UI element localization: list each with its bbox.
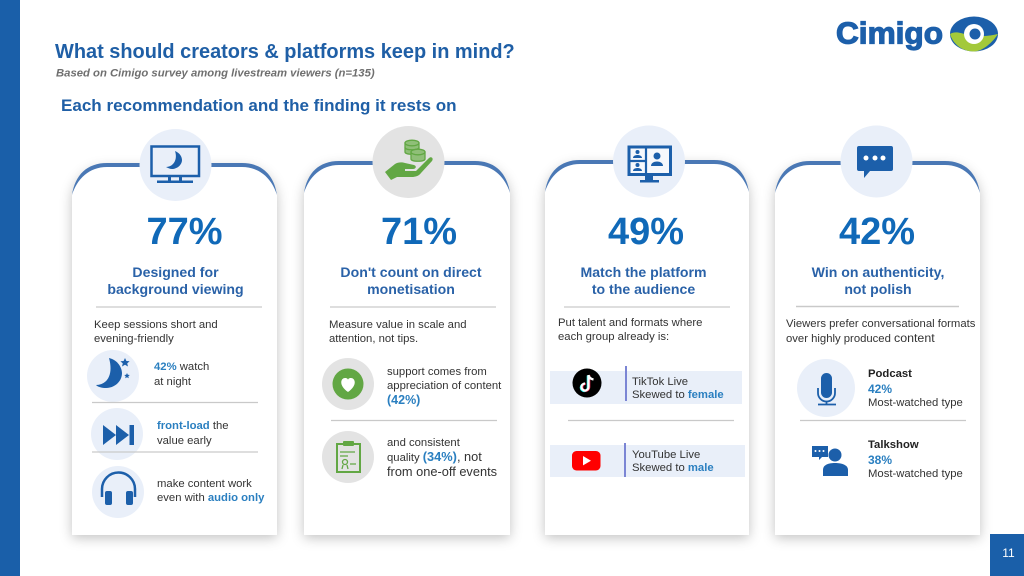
icon: heart	[322, 358, 374, 410]
intro text: evening-friendly	[94, 333, 174, 345]
panel: authenticity	[775, 126, 980, 535]
logo: Cimigo	[836, 16, 998, 52]
finding: podcast: Podcast	[868, 368, 912, 380]
card top arc	[304, 161, 510, 193]
icon: monitor with moon	[140, 129, 212, 201]
finding: consistent quality: quality (34%), not	[387, 449, 482, 464]
card top arc	[545, 160, 749, 192]
statistic: 77%	[146, 211, 223, 253]
card title: Don't count on direct	[340, 264, 482, 280]
intro text: attention, not tips.	[329, 333, 418, 345]
finding: audio only: even with audio only	[157, 492, 264, 504]
finding: night viewing: at night	[154, 376, 192, 388]
tiktok row	[550, 366, 742, 404]
finding: talkshow: Most-watched type	[868, 468, 963, 480]
panel: platform and audience	[545, 126, 749, 535]
intro text: Keep sessions short and	[94, 319, 218, 331]
icon: video call monitor	[613, 126, 685, 198]
card body	[775, 163, 980, 535]
youtube row: Skewed to male	[632, 462, 714, 474]
icon: chat bubble	[840, 126, 912, 198]
finding: appreciation: (42%)	[387, 393, 420, 407]
statistic: 49%	[608, 211, 684, 253]
card title: Win on authenticity,	[812, 264, 944, 280]
card body	[304, 163, 510, 535]
card title: Match the platform	[580, 264, 707, 280]
icon: talk show person	[812, 446, 848, 476]
finding: appreciation: support comes from	[387, 366, 487, 378]
title: What should creators & platforms keep in mind?	[55, 41, 515, 63]
panel: monetisation	[304, 126, 510, 535]
card title: not polish	[844, 281, 912, 297]
icon: headphones	[92, 466, 144, 518]
finding: audio only: make content work	[157, 478, 252, 490]
card title: monetisation	[367, 281, 455, 297]
page number	[990, 534, 1024, 576]
subtitle: Based on Cimigo survey among livestream viewers (n=135)	[56, 68, 375, 80]
card title: Designed for	[132, 264, 219, 280]
icon: clipboard certificate	[322, 431, 374, 483]
intro text: over highly produced content	[786, 331, 935, 345]
icon: microphone	[797, 359, 855, 417]
card title: to the audience	[592, 281, 695, 297]
finding: podcast: Most-watched type	[868, 397, 963, 409]
left accent bar	[0, 0, 20, 576]
youtube row	[550, 443, 745, 477]
intro text: Put talent and formats where	[558, 317, 702, 329]
tiktok row: Skewed to female	[632, 389, 724, 401]
intro text: Measure value in scale and	[329, 319, 467, 331]
section heading: Each recommendation and the finding it rests on	[61, 96, 457, 115]
finding: consistent quality: and consistent	[387, 437, 460, 449]
card title: background viewing	[107, 281, 244, 297]
finding: appreciation: appreciation of content	[387, 380, 502, 392]
statistic: 42%	[839, 211, 915, 253]
card body	[545, 162, 749, 535]
tiktok row: TikTok Live	[632, 376, 688, 388]
card body	[72, 165, 277, 535]
finding: consistent quality: from one-off events	[387, 464, 497, 479]
youtube row: YouTube Live	[632, 449, 700, 461]
card top arc	[775, 161, 980, 193]
finding: front-load: front-load the	[157, 420, 229, 432]
logo: Cimigo: Cimigo	[836, 16, 943, 50]
intro text: Viewers prefer conversational formats	[786, 318, 975, 330]
icon: moon and stars	[87, 350, 139, 402]
finding: talkshow: 38%	[868, 453, 892, 467]
finding: podcast: 42%	[868, 382, 892, 396]
finding: front-load: value early	[157, 435, 212, 447]
finding: night viewing: 42% watch	[154, 361, 209, 373]
intro text: each group already is:	[558, 331, 669, 343]
card top arc	[72, 163, 277, 195]
icon: hand with coins	[372, 126, 444, 198]
statistic: 71%	[381, 211, 457, 253]
icon: fast forward	[91, 408, 143, 460]
page number: 11	[1002, 546, 1015, 560]
finding: talkshow: Talkshow	[868, 439, 919, 451]
panel: background viewing	[72, 129, 277, 535]
